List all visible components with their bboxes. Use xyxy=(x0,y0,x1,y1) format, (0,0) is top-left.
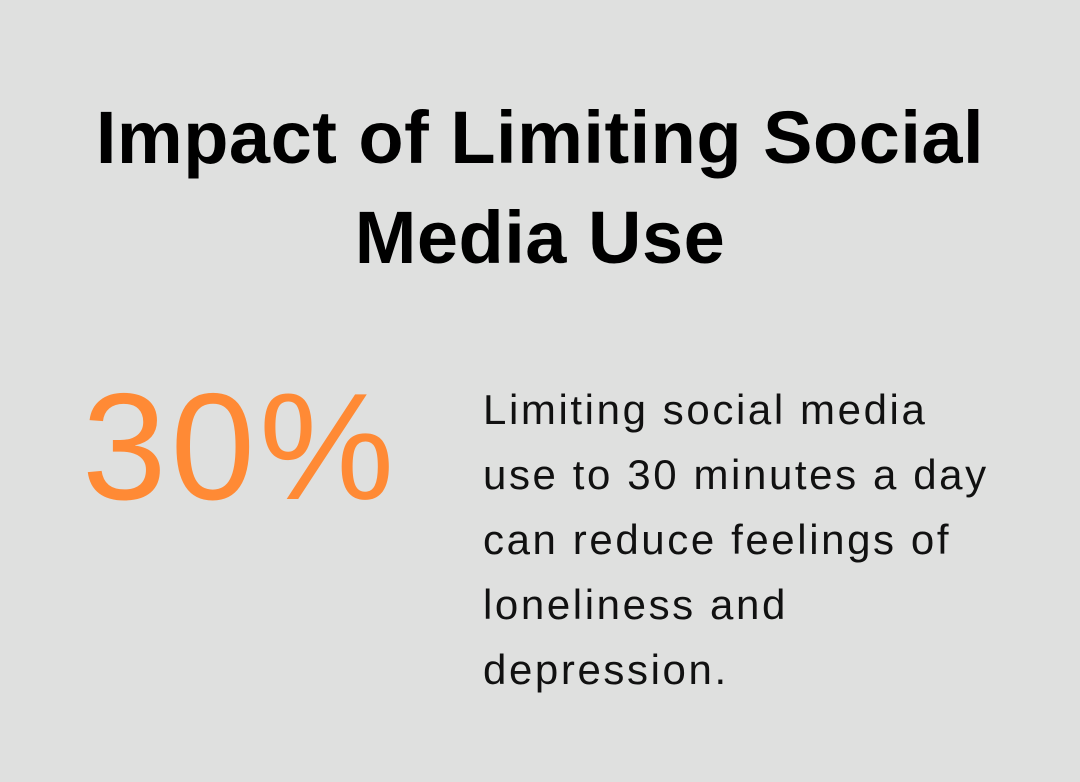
description text xyxy=(483,386,989,693)
description text: can reduce feelings of xyxy=(483,516,951,563)
title: Media Use xyxy=(355,196,725,279)
description text: loneliness and xyxy=(483,581,788,628)
title xyxy=(96,96,984,279)
title: Impact of Limiting Social xyxy=(96,96,984,179)
description text: depression. xyxy=(483,646,729,693)
description text: use to 30 minutes a day xyxy=(483,451,989,498)
description text: Limiting social media xyxy=(483,386,927,433)
stat number: 30% xyxy=(82,362,398,532)
